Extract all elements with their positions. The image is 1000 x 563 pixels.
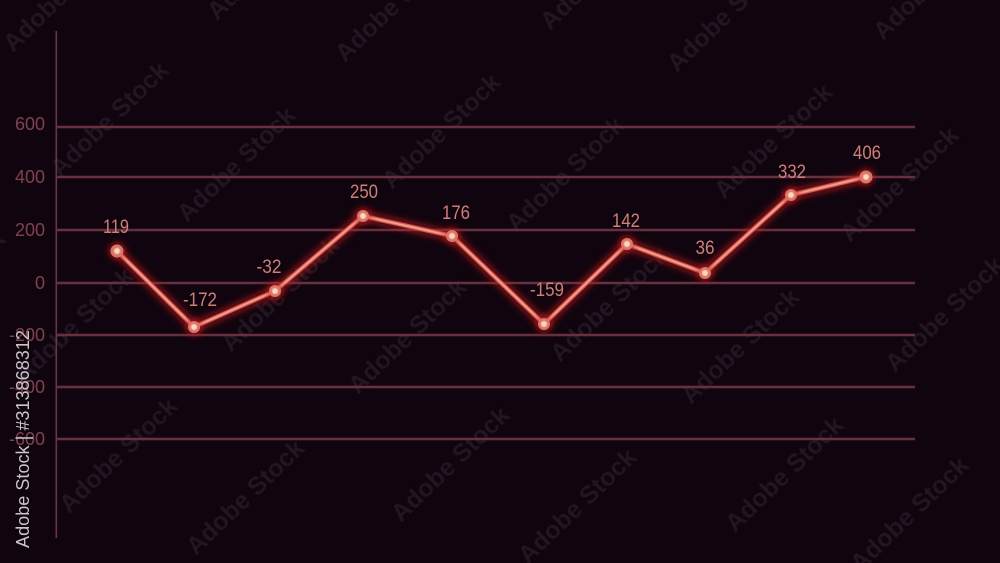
watermark: Adobe Stock diagonal pattern: Adobe Stock: [343, 273, 472, 399]
watermark: Adobe Stock diagonal pattern: Adobe Stock: [45, 56, 174, 182]
y axis labels: -600: [9, 429, 45, 449]
data value labels: 332: [778, 162, 806, 183]
watermark: Adobe Stock diagonal pattern: Adobe Stock: [54, 392, 183, 518]
data value labels: 176: [442, 203, 470, 224]
y axis labels: 400: [15, 167, 45, 187]
data value labels: 142: [612, 211, 640, 232]
watermark: stock ID side text: Adobe Stock | #313868312: [13, 330, 33, 548]
watermark: Adobe Stock diagonal pattern: Adobe Stock: [216, 231, 345, 357]
data value labels: 36: [696, 238, 714, 259]
y axis line: [56, 31, 57, 538]
watermark: Adobe Stock diagonal pattern: Adobe Stock: [386, 401, 515, 527]
data value labels: -32: [256, 257, 282, 278]
watermark: Adobe Stock diagonal pattern: Adobe Stock: [835, 121, 964, 247]
y axis labels: 0: [35, 273, 45, 293]
y axis labels: -400: [9, 377, 45, 397]
data value labels: -159: [530, 280, 564, 301]
data value labels: 119: [103, 217, 129, 238]
y axis labels: 200: [15, 220, 45, 240]
y axis labels: 600: [15, 114, 45, 134]
watermark: Adobe Stock diagonal pattern: Adobe Stock: [545, 241, 674, 367]
watermark: Adobe Stock diagonal pattern: Adobe Stock: [10, 262, 139, 388]
watermark: Adobe Stock diagonal pattern: Adobe Stock: [709, 78, 838, 204]
y axis labels: [9, 114, 45, 449]
watermark: Adobe Stock diagonal pattern: Adobe Stock: [720, 411, 849, 537]
y axis labels: -200: [9, 325, 45, 345]
gridlines: [57, 127, 915, 439]
watermark: Adobe Stock diagonal pattern: Adobe Stock: [676, 283, 805, 409]
watermark: Adobe Stock diagonal pattern: Adobe Stock: [501, 111, 630, 237]
data value labels: 250: [350, 182, 378, 203]
data point markers: [109, 169, 874, 335]
data value labels: 406: [853, 143, 881, 164]
data value labels: [103, 143, 881, 311]
watermark: Adobe Stock diagonal pattern: Adobe Stock: [181, 434, 310, 560]
watermark: Adobe Stock diagonal pattern: Adobe Stock: [172, 101, 301, 227]
data value labels: -172: [183, 290, 217, 311]
data line with neon glow: [117, 177, 866, 327]
watermark: Adobe Stock diagonal pattern: Adobe Stock: [377, 68, 506, 194]
